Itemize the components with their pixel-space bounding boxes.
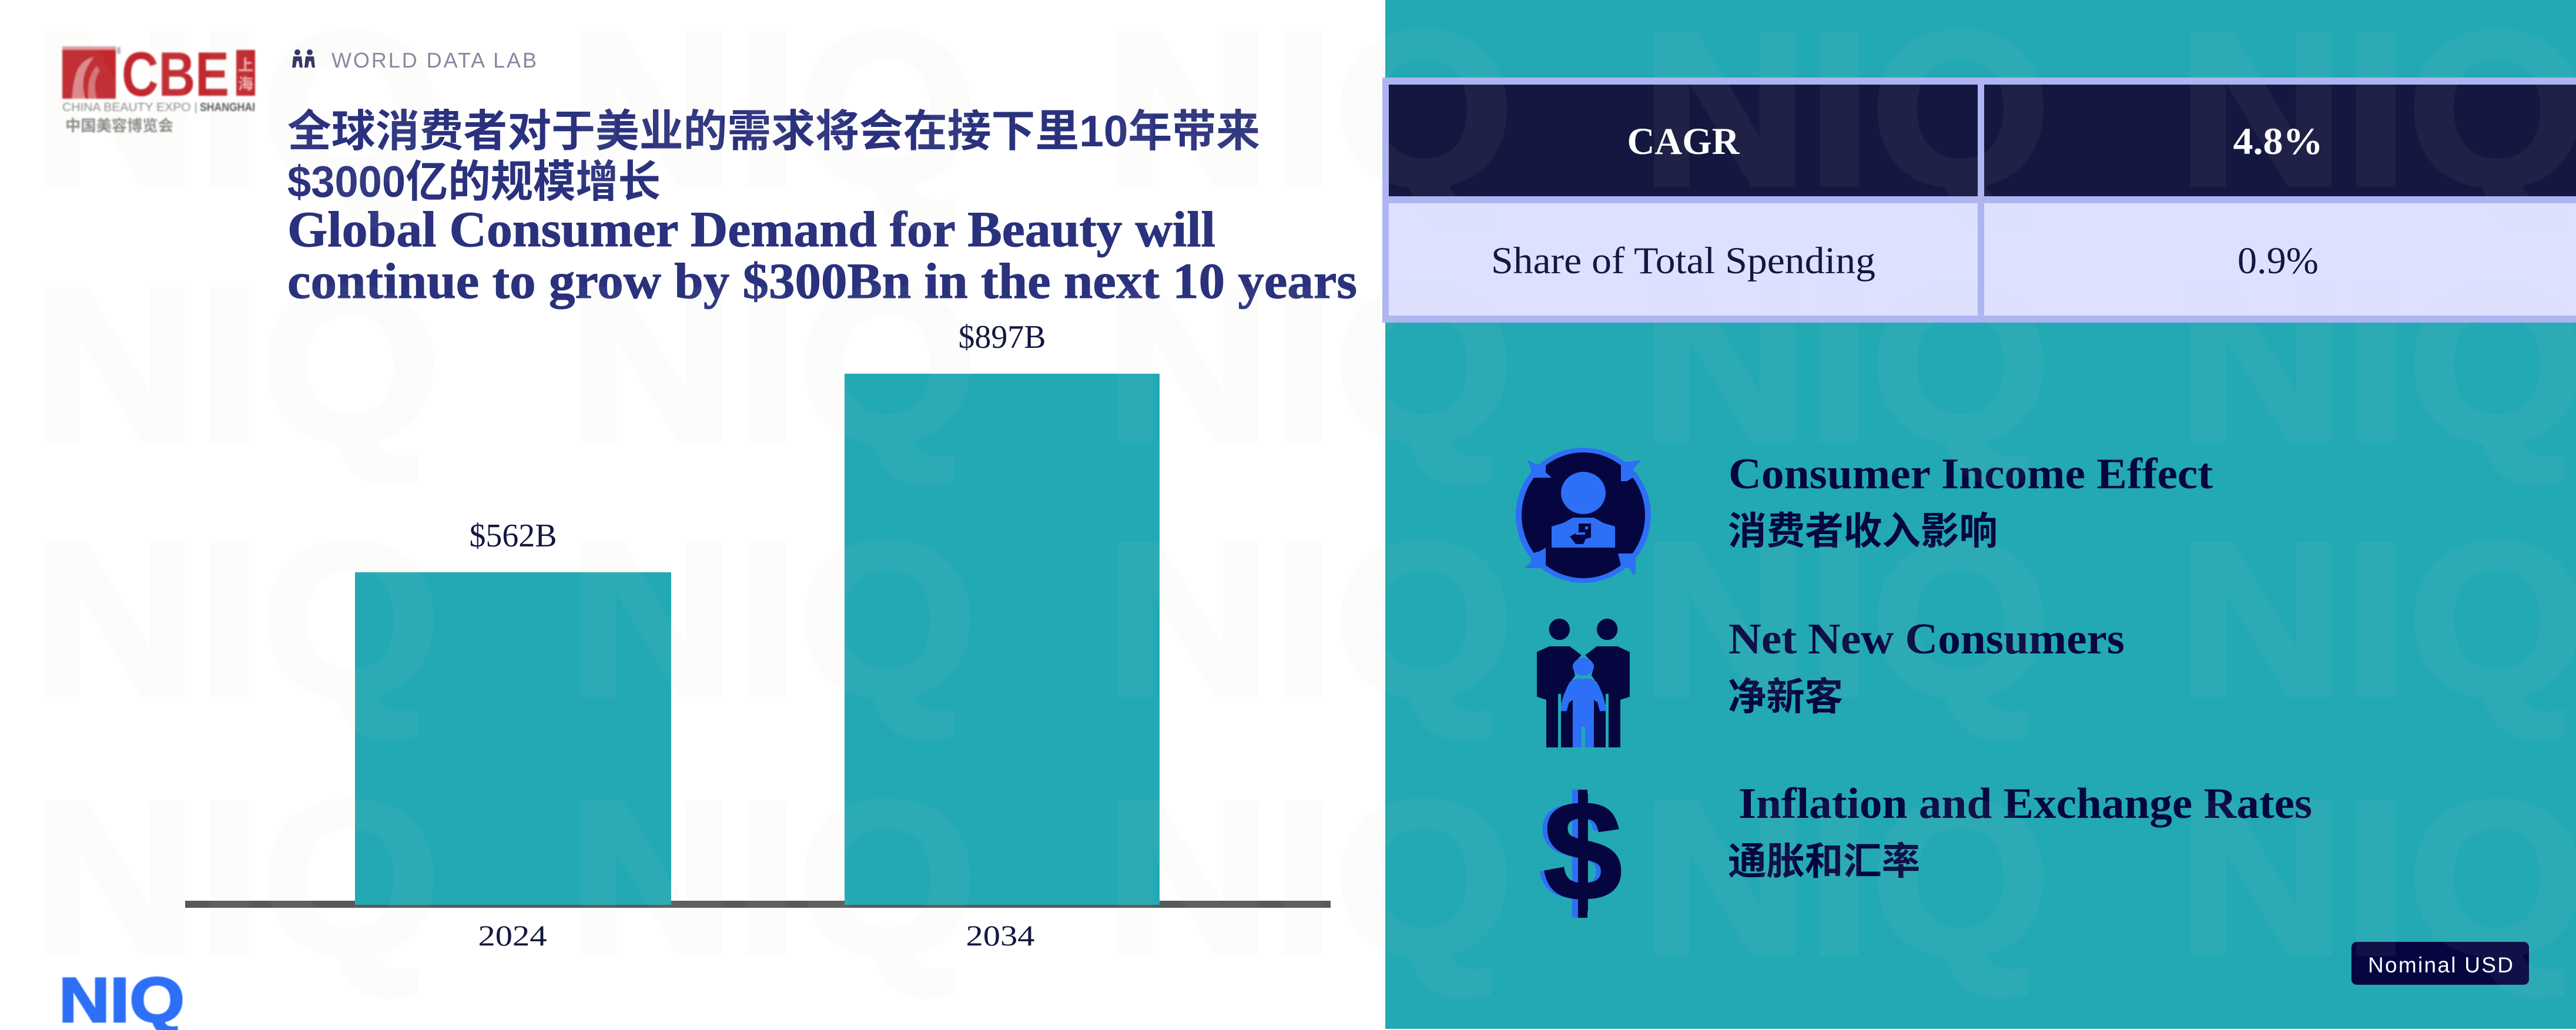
bar 2034 (845, 319, 1160, 952)
text: NIQ (32, 498, 440, 741)
icon: family (1537, 619, 1630, 747)
text: NIQ (1105, 757, 1513, 999)
driver: inflation and exchange rates: 通胀和汇率 (1728, 840, 1920, 883)
driver: net new consumers: Net New Consumers (1729, 615, 2125, 663)
bar 2034: 2034 (966, 919, 1034, 952)
badge: nominal USD: Nominal USD (2368, 953, 2513, 977)
CBE logo: CBE (122, 39, 229, 109)
table: CAGR and share of spending: 4.8% (2233, 120, 2323, 163)
text: NIQ (1642, 757, 2050, 999)
bar 2024: $562B (469, 518, 557, 554)
icon: consumer income (1516, 448, 1651, 583)
text: NIQ (568, 243, 977, 486)
CBE logo: CHINA BEAUTY EXPO | (62, 101, 197, 114)
CBE logo (62, 39, 255, 135)
text: NIQ (32, 243, 440, 486)
CBE logo: 上 (238, 56, 253, 74)
CBE logo: 中国美容博览会 (65, 117, 173, 135)
CBE logo: 海 (238, 75, 253, 93)
bar 2024 (355, 518, 671, 952)
table: CAGR and share of spending: Share of Total Spending (1491, 240, 1875, 282)
text: NIQ (568, 757, 977, 999)
badge: nominal USD (2351, 942, 2529, 985)
text: NIQ (32, 757, 440, 999)
table: CAGR and share of spending (1382, 78, 2576, 323)
text: NIQ (568, 498, 977, 741)
bar chart (185, 319, 1331, 952)
World Data Lab logo: WORLD DATA LAB (331, 48, 537, 72)
table: CAGR and share of spending: 0.9% (2237, 240, 2319, 282)
title: Global Consumer Demand for Beauty will (287, 201, 1215, 257)
text: NIQ (1105, 498, 1513, 741)
table: CAGR and share of spending: CAGR (1627, 120, 1740, 163)
title: $3000亿的规模增长 (287, 157, 661, 206)
driver: inflation and exchange rates (1728, 780, 2312, 883)
bar 2024: 2024 (478, 919, 547, 952)
text: NIQ (1642, 243, 2050, 486)
text: NIQ (1642, 498, 2050, 741)
text: NIQ (2178, 757, 2576, 999)
panel: right drivers panel (1382, 0, 2576, 1029)
title (287, 106, 1357, 309)
driver: consumer income effect: Consumer Income Effect (1729, 450, 2213, 498)
text: NIQ (2178, 243, 2576, 486)
icon: dollar: $ (1543, 772, 1622, 930)
driver: net new consumers: 净新客 (1728, 675, 1843, 718)
bar 2034: $897B (958, 319, 1046, 355)
driver: consumer income effect (1728, 450, 2213, 552)
text: NIQ (1105, 243, 1513, 486)
driver: inflation and exchange rates: Inflation and Exchange Rates (1738, 780, 2312, 828)
driver: consumer income effect: 消费者收入影响 (1728, 509, 1998, 552)
driver: net new consumers (1728, 615, 2125, 718)
title: 全球消费者对于美业的需求将会在接下里10年带来 (287, 106, 1260, 156)
panel: left chart panel (59, 39, 1357, 1030)
text: NIQ (2178, 498, 2576, 741)
icon: dollar: $ (1537, 772, 1616, 930)
CBE logo: SHANGHAI (200, 101, 255, 114)
title: continue to grow by $300Bn in the next 10 years (287, 253, 1357, 309)
